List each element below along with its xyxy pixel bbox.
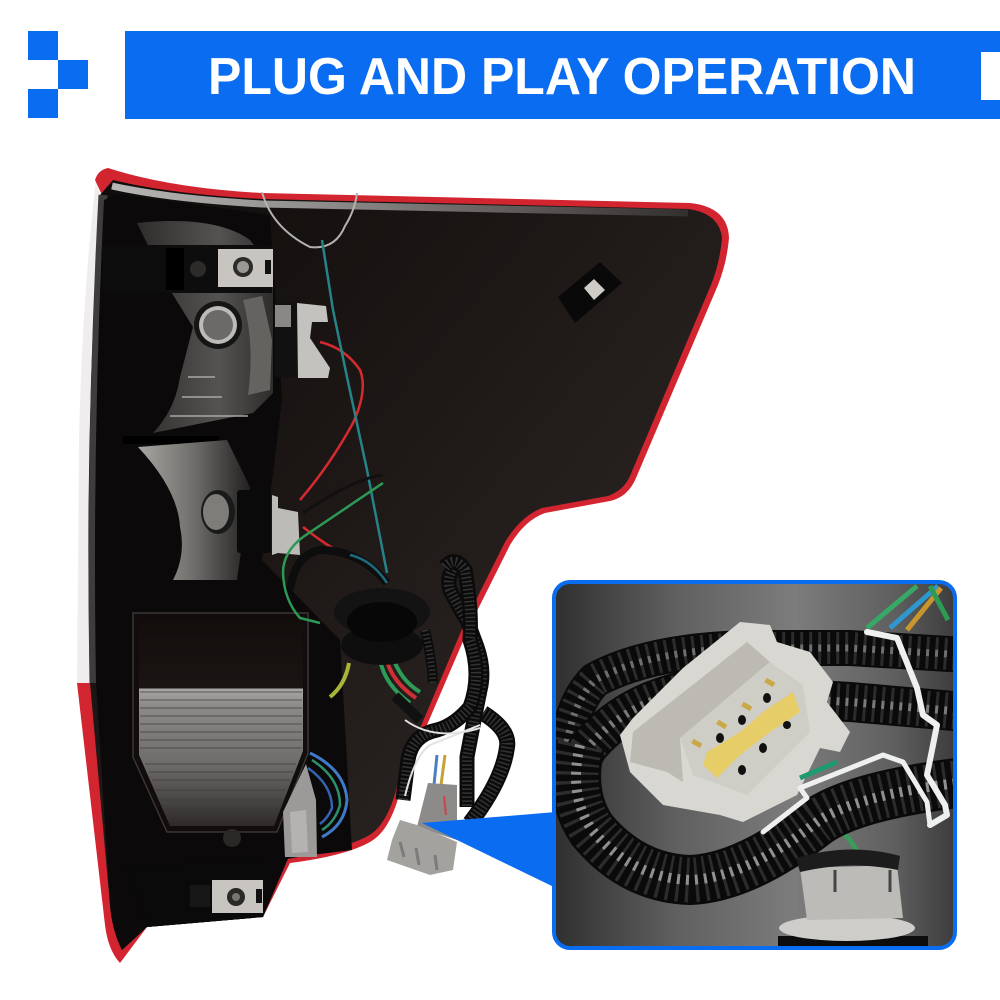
bulb socket in inset <box>778 849 928 946</box>
lower bulb connector <box>283 753 347 857</box>
mounting nut <box>558 262 622 323</box>
lower bulb socket <box>123 436 300 580</box>
green wire at connector <box>800 762 837 778</box>
clear lens strip <box>77 180 100 683</box>
left interior black <box>95 194 352 950</box>
bottom mount bracket <box>127 829 263 927</box>
tail light housing <box>77 168 729 963</box>
left frame edge <box>93 195 103 683</box>
connector cavity <box>630 642 770 782</box>
lens ring <box>194 301 242 349</box>
top silver band <box>112 186 688 213</box>
logo icon: blue squares <box>28 31 88 118</box>
inset photo panel <box>554 582 965 948</box>
red outer rim <box>77 168 729 963</box>
connector face <box>680 662 810 795</box>
dark inner body <box>88 180 722 950</box>
gold terminals <box>691 678 800 778</box>
title banner <box>125 31 1000 119</box>
corrugated harness <box>403 560 507 823</box>
title: PLUG AND PLAY OPERATION <box>208 48 916 106</box>
grommet and wires <box>330 588 430 720</box>
blue callout pointer <box>422 812 556 888</box>
connector housing <box>620 622 850 822</box>
small grey connector <box>387 783 457 875</box>
mounting clip <box>218 249 273 287</box>
bottom clip <box>212 880 263 913</box>
lower lamp lens block <box>133 613 308 832</box>
upper bulb socket <box>103 221 330 433</box>
wires <box>262 192 387 623</box>
inset wires <box>843 586 948 858</box>
white zip ties <box>763 632 947 832</box>
corrugated harness tubes <box>565 648 965 880</box>
